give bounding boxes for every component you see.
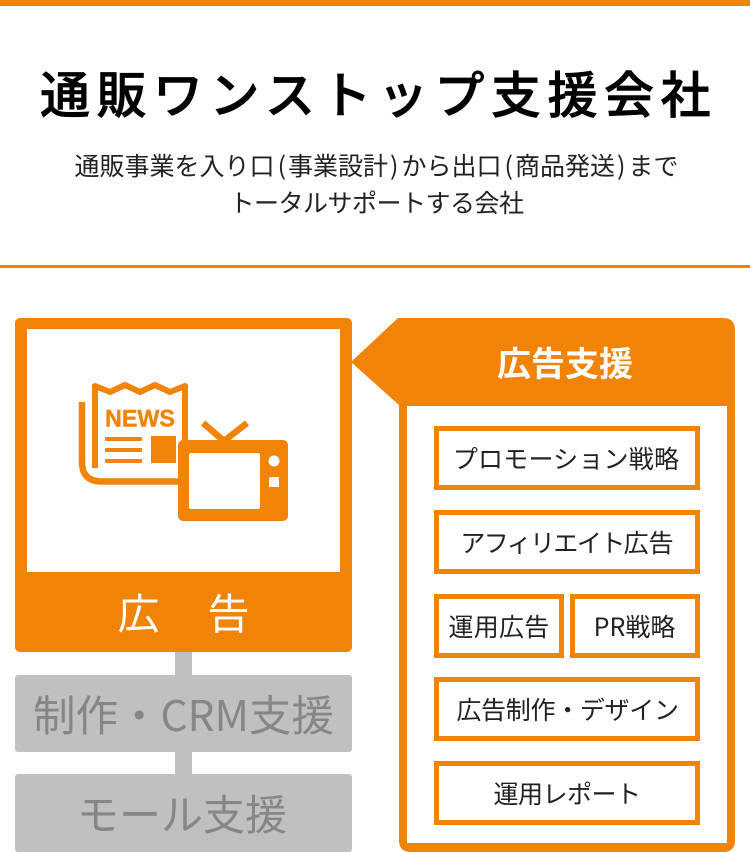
item: operations report: 運用レポート <box>493 775 640 811</box>
support heading: 広告支援 <box>497 336 633 386</box>
subtitle text block <box>75 146 678 220</box>
item: affiliate ads: アフィリエイト <box>460 524 624 560</box>
item: PR strategy <box>570 594 700 658</box>
panel: production and CRM support: 制作・CRM支援 <box>33 682 334 744</box>
item: promotion strategy <box>434 426 700 490</box>
panel: mall support: モール支援 <box>77 782 287 842</box>
callout header shape <box>352 318 735 852</box>
panel: advertising card <box>15 318 352 652</box>
icon area <box>27 329 340 572</box>
subtitle text block: 通販事業を入り口(事業設計)から出口(商品発送)まで <box>75 146 678 182</box>
item: operations report <box>434 761 700 825</box>
subtitle text block: トータルサポートする会社 <box>229 184 524 220</box>
connector <box>175 652 192 675</box>
item: affiliate ads: 広告 <box>624 524 674 560</box>
item: promotion strategy: プロモーション戦略 <box>453 440 679 476</box>
advertising label: 広告 <box>117 580 298 642</box>
connector <box>175 752 192 774</box>
panel: advertising support <box>352 318 735 852</box>
item: ad production and design: 広告制作・デザイン <box>456 691 679 727</box>
item: PR strategy: PR戦略 <box>594 608 675 644</box>
item: ad operations <box>434 594 564 658</box>
header divider <box>0 265 750 268</box>
item: ad operations: 運用広告 <box>448 608 550 644</box>
panel: mall support <box>15 774 352 852</box>
icon: newspaper and television: NEWS <box>105 406 175 432</box>
title: 通販ワンストップ支援会社 <box>40 56 717 128</box>
item: affiliate ads <box>434 510 700 574</box>
top accent bar <box>0 0 750 6</box>
item: ad production and design <box>434 677 700 741</box>
